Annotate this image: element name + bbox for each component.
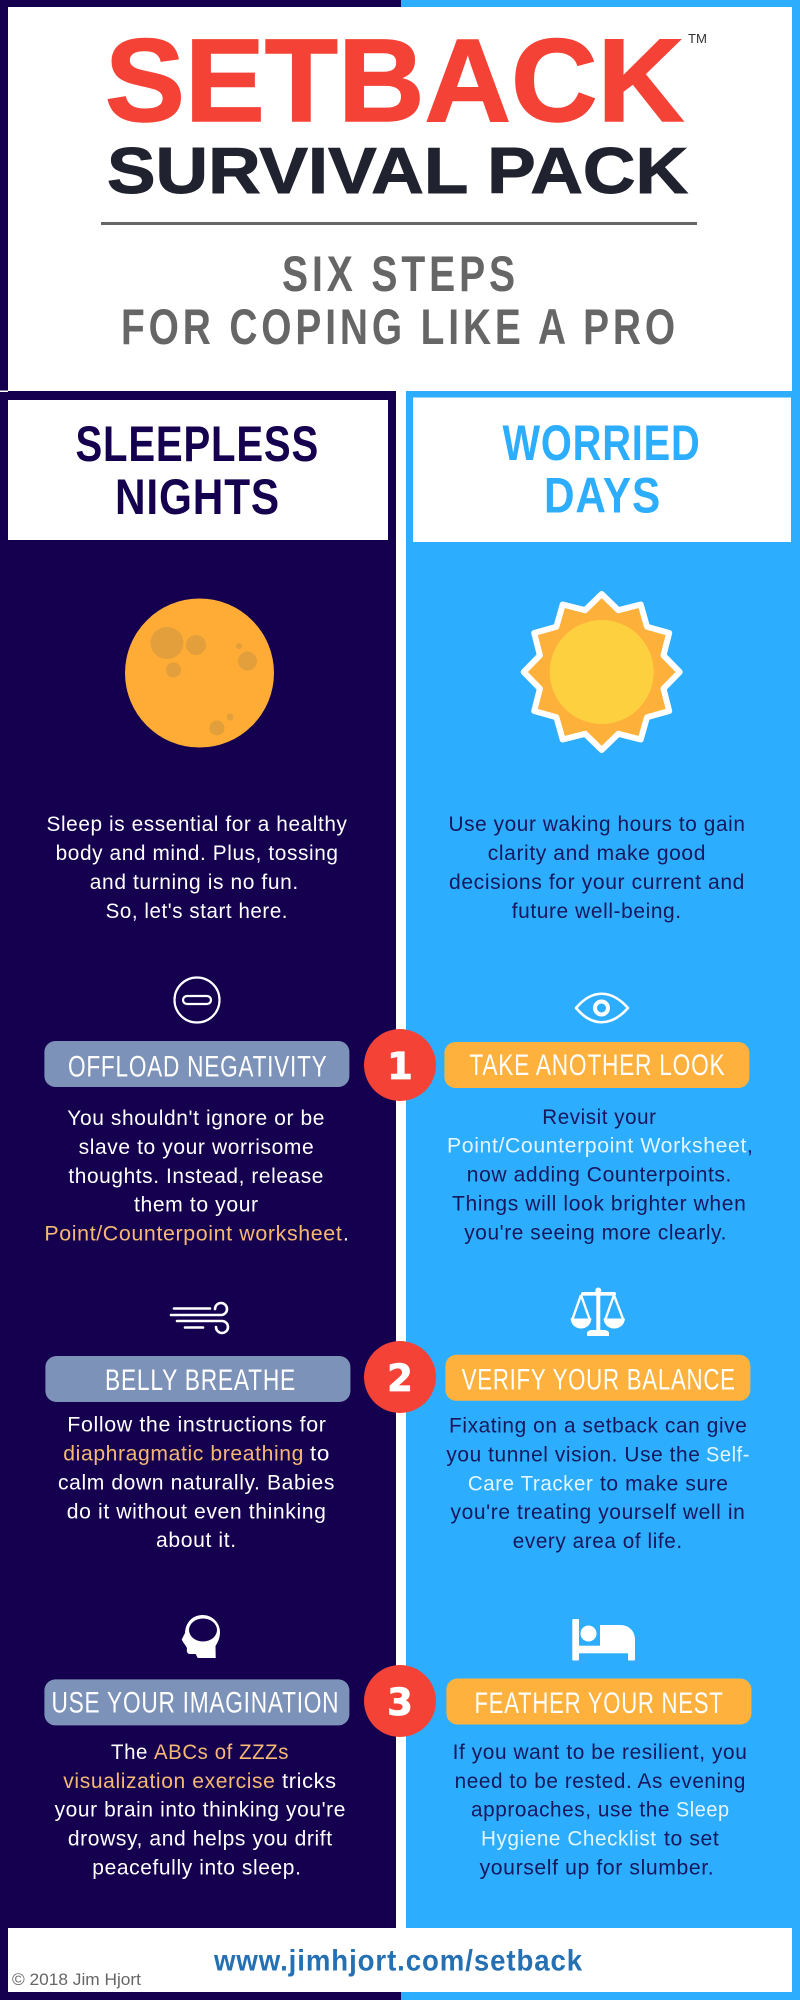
panel: sleepless nights column (0, 390, 396, 1928)
text: take another look: now adding Counterpoints. (467, 1164, 732, 1187)
text: belly breathe: to (310, 1442, 330, 1465)
text: verify your balance: Fixating on a setback can give (449, 1414, 747, 1437)
icon: bed (572, 1619, 635, 1660)
text: take another look: , (747, 1135, 753, 1158)
text: use your imagination: ABCs of ZZZs (154, 1741, 289, 1764)
badge: step 1 (364, 1029, 436, 1101)
text: use your imagination: tricks (282, 1770, 337, 1793)
text: use your imagination: drowsy, and helps you drift (68, 1828, 333, 1851)
text: belly breathe: calm down naturally. Babies (58, 1471, 335, 1494)
subtitle: SIX STEPS (282, 246, 519, 302)
label: belly breathe: BELLY BREATHE (105, 1364, 296, 1397)
label: feather your nest (446, 1678, 751, 1724)
subtitle (121, 246, 679, 355)
text: sleep intro: So, let's start here. (106, 900, 288, 923)
icon: eye (576, 994, 628, 1022)
footer (8, 1928, 792, 1992)
icon: minus circle (174, 978, 220, 1022)
text: sleep intro: body and mind. Plus, tossing (56, 842, 339, 865)
heading: sleepless nights (8, 400, 388, 540)
text: belly breathe: diaphragmatic breathing (63, 1442, 304, 1465)
text: belly breathe: do it without even thinking (67, 1500, 327, 1523)
label: use your imagination: USE YOUR IMAGINATION (52, 1686, 339, 1720)
text: use your imagination: The (111, 1741, 148, 1764)
badge: step 3 (364, 1665, 436, 1737)
heading: worried days: DAYS (544, 468, 661, 524)
label: verify your balance (445, 1355, 750, 1401)
badge: step 2 (364, 1341, 436, 1413)
text: take another look: Revisit your (542, 1106, 657, 1129)
label: take another look (444, 1042, 749, 1088)
text: belly breathe: Follow the instructions for (67, 1414, 327, 1436)
text: verify your balance: you're treating yourself well in (450, 1501, 745, 1524)
text: verify your balance: Self- (706, 1443, 750, 1466)
text: feather your nest (453, 1741, 747, 1880)
text: feather your nest: yourself up for slumber. (480, 1857, 714, 1880)
text: feather your nest: Sleep (676, 1799, 730, 1822)
text: worried intro: future well-being. (512, 900, 682, 923)
text: sleep intro: Sleep is essential for a healthy (46, 813, 348, 836)
text: worried intro: clarity and make good (488, 842, 706, 865)
icon: wind (171, 1303, 228, 1333)
panel: worried days column (396, 391, 800, 1928)
label: offload negativity: OFFLOAD NEGATIVITY (68, 1050, 328, 1084)
text: take another look: you're seeing more clearly. (464, 1222, 727, 1244)
icon: head (182, 1615, 220, 1658)
text: take another look: Point/Counterpoint Worksheet (447, 1135, 747, 1158)
text: verify your balance: Care Tracker (468, 1472, 593, 1495)
text: sleep intro: and turning is no fun. (90, 871, 299, 894)
text: take another look: Things will look brighter when (452, 1193, 746, 1216)
text: offload negativity: Point/Counterpoint worksheet (44, 1222, 342, 1246)
heading: worried days: WORRIED (502, 415, 700, 471)
text: verify your balance: every area of life. (513, 1530, 683, 1553)
text: worried intro: decisions for your current and (449, 871, 745, 894)
icon: moon (125, 598, 274, 748)
footer link: www.jimhjort.com/setback (213, 1944, 583, 1978)
text: offload negativity (44, 1107, 349, 1246)
text: verify your balance (446, 1414, 750, 1553)
panel: title (8, 7, 792, 391)
text: feather your nest: need to be rested. As evening (455, 1770, 746, 1793)
text: take another look (447, 1106, 753, 1244)
text: offload negativity: them to your (134, 1194, 259, 1216)
label: take another look: TAKE ANOTHER LOOK (469, 1049, 725, 1082)
text: offload negativity: You shouldn't ignore or be (67, 1107, 325, 1130)
text: feather your nest: to set (664, 1828, 719, 1851)
text: offload negativity: thoughts. Instead, release (68, 1165, 324, 1188)
text: verify your balance: to make sure (600, 1472, 729, 1495)
text: feather your nest: approaches, use the (471, 1799, 670, 1822)
icon: scales (570, 1288, 625, 1336)
badge: step 3: 3 (387, 1681, 413, 1724)
heading: sleepless nights: SLEEPLESS (76, 416, 319, 472)
badge: step 1: 1 (387, 1045, 413, 1088)
text: verify your balance: you tunnel vision. Use the (446, 1443, 700, 1466)
text: belly breathe (58, 1414, 335, 1552)
text: feather your nest: If you want to be resilient, you (453, 1741, 747, 1764)
text: offload negativity: slave to your worrisome (79, 1136, 314, 1159)
heading: sleepless nights: NIGHTS (115, 469, 280, 525)
text: use your imagination: visualization exercise (63, 1770, 275, 1793)
copyright: © 2018 Jim Hjort (12, 1970, 141, 1989)
label: use your imagination (44, 1679, 349, 1725)
badge: step 2: 2 (387, 1357, 413, 1400)
text: use your imagination: your brain into thinking you're (55, 1799, 346, 1822)
text: sleep intro (46, 813, 348, 923)
text: use your imagination (55, 1741, 346, 1880)
text: belly breathe: about it. (156, 1529, 237, 1552)
title: SETBACK: SETBACK (105, 15, 684, 147)
heading: worried days (413, 398, 791, 542)
label: offload negativity (44, 1041, 349, 1087)
icon: sun (524, 594, 680, 750)
text: feather your nest: Hygiene Checklist (481, 1828, 657, 1851)
trademark: TM (688, 31, 707, 46)
text: use your imagination: peacefully into sleep. (92, 1857, 302, 1880)
text: worried intro: Use your waking hours to gain (448, 813, 746, 836)
text: worried intro (448, 813, 746, 923)
title: SURVIVAL PACK: SURVIVAL PACK (107, 134, 688, 207)
text: offload negativity: . (343, 1222, 349, 1246)
label: belly breathe (45, 1356, 350, 1402)
